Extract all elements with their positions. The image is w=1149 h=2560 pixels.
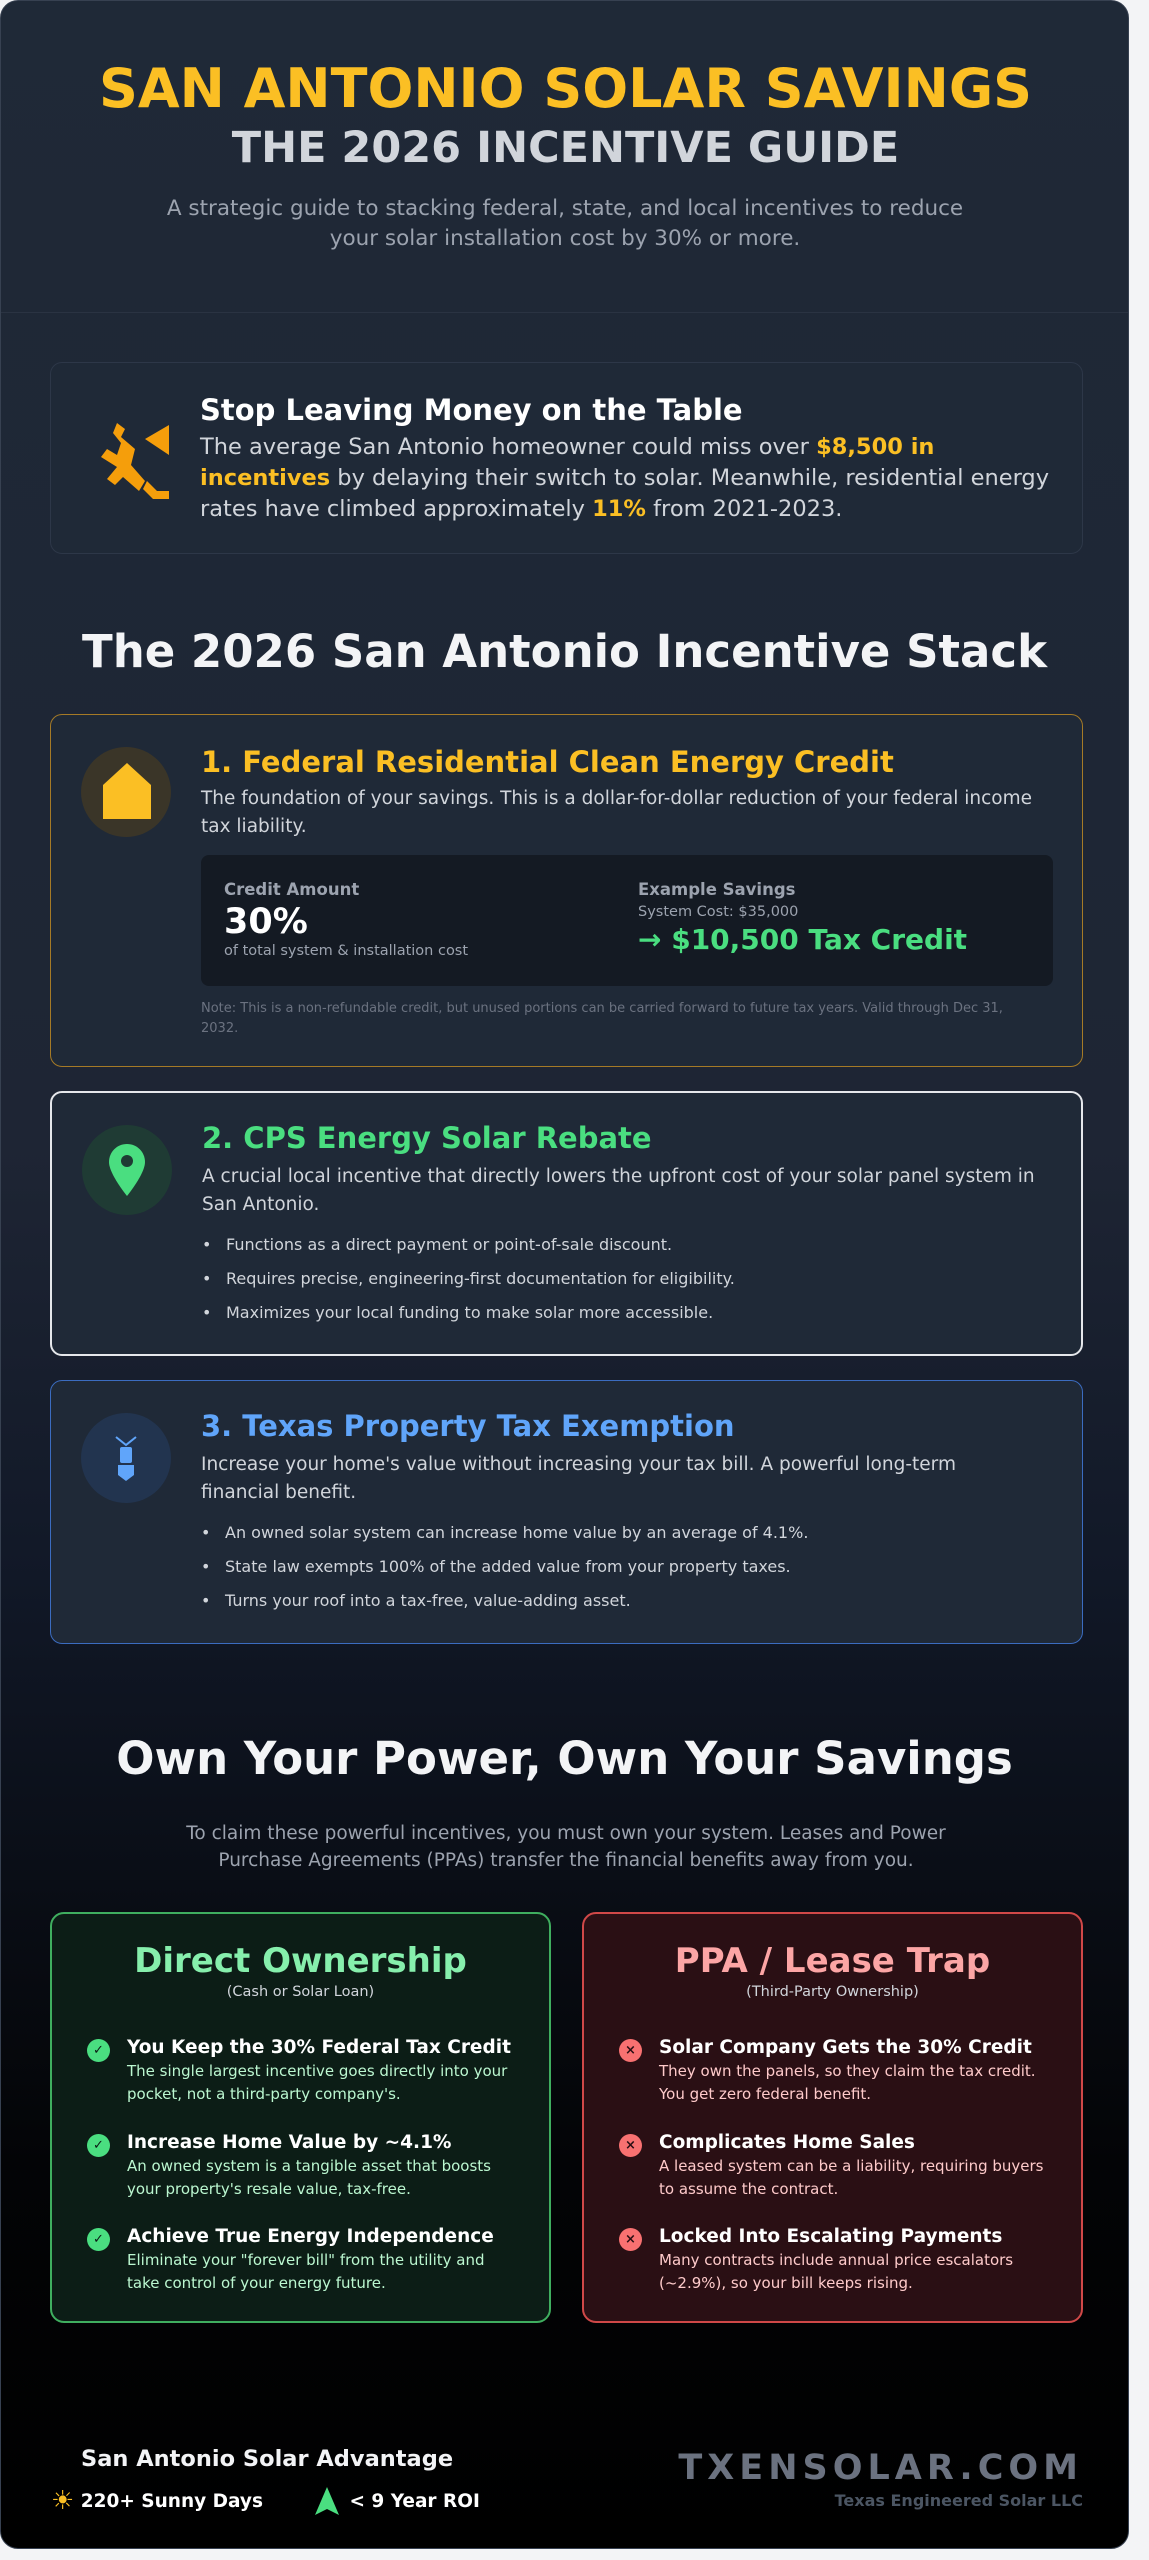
item: A leased system can be a liability, requiring buyers to assume the contract. <box>659 2157 1044 2198</box>
item: You Keep the 30% Federal Tax Credit <box>127 2037 511 2058</box>
panel: direct ownership: (Cash or Solar Loan) <box>227 1984 374 2000</box>
header <box>1 1 1130 313</box>
body text: The average San Antonio homeowner could miss over $8,500 in incentives by delaying their switch to solar. Meanwhile, residential energy rates have climbed approximately 11% from 2021-2023. <box>200 434 1049 522</box>
description: Increase your home's value without increasing your tax bill. A powerful long-term financial benefit. <box>201 1454 956 1503</box>
item <box>619 2226 1013 2292</box>
bullet list: Requires precise, engineering-first documentation for eligibility. <box>226 1269 735 1288</box>
description: The foundation of your savings. This is a dollar-for-dollar reduction of your federal income tax liability. <box>201 788 1032 837</box>
callout: stop leaving money <box>50 362 1083 554</box>
title: PPA / Lease Trap <box>675 1941 990 1981</box>
panel: PPA lease trap: × <box>625 2138 636 2153</box>
item: Eliminate your "forever bill" from the utility and take control of your energy future. <box>127 2251 485 2292</box>
item <box>87 2226 494 2292</box>
bullet list <box>203 1523 808 1610</box>
intro text: your solar installation cost by 30% or more. <box>330 226 800 251</box>
panel: CPS rebate <box>50 1091 1083 1356</box>
panel: PPA lease trap: × <box>625 2232 636 2247</box>
stat box: Example Savings <box>638 880 795 899</box>
stat: sunny days: ☀ <box>51 2486 74 2516</box>
panel: PPA lease trap: (Third-Party Ownership) <box>746 1984 919 2000</box>
stat box: Credit Amount <box>224 880 359 899</box>
item <box>87 2037 511 2103</box>
item: An owned system is a tangible asset that boosts your property's resale value, tax-free. <box>127 2157 491 2198</box>
title: 3. Texas Property Tax Exemption <box>201 1409 735 1443</box>
item: Achieve True Energy Independence <box>127 2226 494 2247</box>
intro text <box>167 196 963 251</box>
bullet list: Functions as a direct payment or point-of-sale discount. <box>226 1235 672 1254</box>
bullet list: Maximizes your local funding to make solar more accessible. <box>226 1303 713 1322</box>
stat: ROI <box>315 2487 480 2515</box>
panel: direct ownership: ✓ <box>93 2138 104 2153</box>
stat: sunny days: 220+ Sunny Days <box>81 2490 263 2512</box>
item: Locked Into Escalating Payments <box>659 2226 1002 2247</box>
section heading: own your power: Own Your Power, Own Your Savings <box>116 1732 1013 1785</box>
stat box: System Cost: $35,000 <box>638 904 798 920</box>
item <box>619 2037 1036 2103</box>
title: 2. CPS Energy Solar Rebate <box>202 1121 652 1155</box>
bullet list: An owned solar system can increase home value by an average of 4.1%. <box>225 1523 808 1542</box>
footer heading: San Antonio Solar Advantage <box>81 2446 453 2472</box>
footer <box>51 2446 1083 2516</box>
stat box: → $10,500 Tax Credit <box>638 923 967 956</box>
panel: direct ownership: ✓ <box>93 2232 104 2247</box>
brand: TXENSOLAR.COM <box>678 2448 1083 2488</box>
item: They own the panels, so they claim the tax credit. You get zero federal benefit. <box>659 2062 1036 2103</box>
stat: sunny days <box>51 2486 263 2516</box>
panel: direct ownership: ✓ <box>93 2043 104 2058</box>
panel: property tax exemption <box>50 1380 1083 1644</box>
panel: direct ownership <box>50 1912 551 2323</box>
footer: Texas Engineered Solar LLC <box>835 2491 1083 2510</box>
intro paragraph: To claim these powerful incentives, you must own your system. Leases and Power Purchase Agreements (PPAs) transfer the financial benefits away from you. <box>186 1823 946 1871</box>
stat: ROI: < 9 Year ROI <box>349 2490 480 2512</box>
item <box>87 2132 491 2198</box>
note: Note: This is a non-refundable credit, but unused portions can be carried forward to future tax years. Valid through Dec 31, 2032. <box>201 1001 1003 1036</box>
stat box: 30% <box>224 902 308 942</box>
bullet list <box>204 1235 735 1322</box>
panel: federal credit <box>50 714 1083 1067</box>
item <box>619 2132 1044 2198</box>
icon: map pin <box>82 1125 172 1215</box>
item: Increase Home Value by ~4.1% <box>127 2132 451 2153</box>
item: Solar Company Gets the 30% Credit <box>659 2037 1032 2058</box>
icon: house <box>81 747 171 837</box>
item: Many contracts include annual price escalators (~2.9%), so your bill keeps rising. <box>659 2251 1013 2292</box>
icon: tie <box>81 1413 171 1503</box>
icon: broken plug <box>101 423 169 499</box>
stat box <box>201 855 1053 986</box>
panel: PPA lease trap <box>582 1912 1083 2323</box>
stat box: of total system & installation cost <box>224 943 468 959</box>
bullet list: Turns your roof into a tax-free, value-adding asset. <box>225 1591 631 1610</box>
description: A crucial local incentive that directly lowers the upfront cost of your solar panel system in San Antonio. <box>202 1166 1035 1215</box>
item: Complicates Home Sales <box>659 2132 915 2153</box>
section heading: incentive stack: The 2026 San Antonio Incentive Stack <box>82 625 1047 678</box>
subtitle heading: THE 2026 INCENTIVE GUIDE <box>232 123 899 173</box>
item: The single largest incentive goes directly into your pocket, not a third-party company's. <box>127 2062 507 2103</box>
heading: Stop Leaving Money on the Table <box>200 393 743 427</box>
title: SAN ANTONIO SOLAR SAVINGS <box>99 57 1032 120</box>
panel: PPA lease trap: × <box>625 2043 636 2058</box>
title: Direct Ownership <box>134 1941 467 1981</box>
bullet list: State law exempts 100% of the added value from your property taxes. <box>225 1557 791 1576</box>
title: 1. Federal Residential Clean Energy Credit <box>201 745 894 779</box>
intro text: A strategic guide to stacking federal, state, and local incentives to reduce <box>167 196 963 221</box>
